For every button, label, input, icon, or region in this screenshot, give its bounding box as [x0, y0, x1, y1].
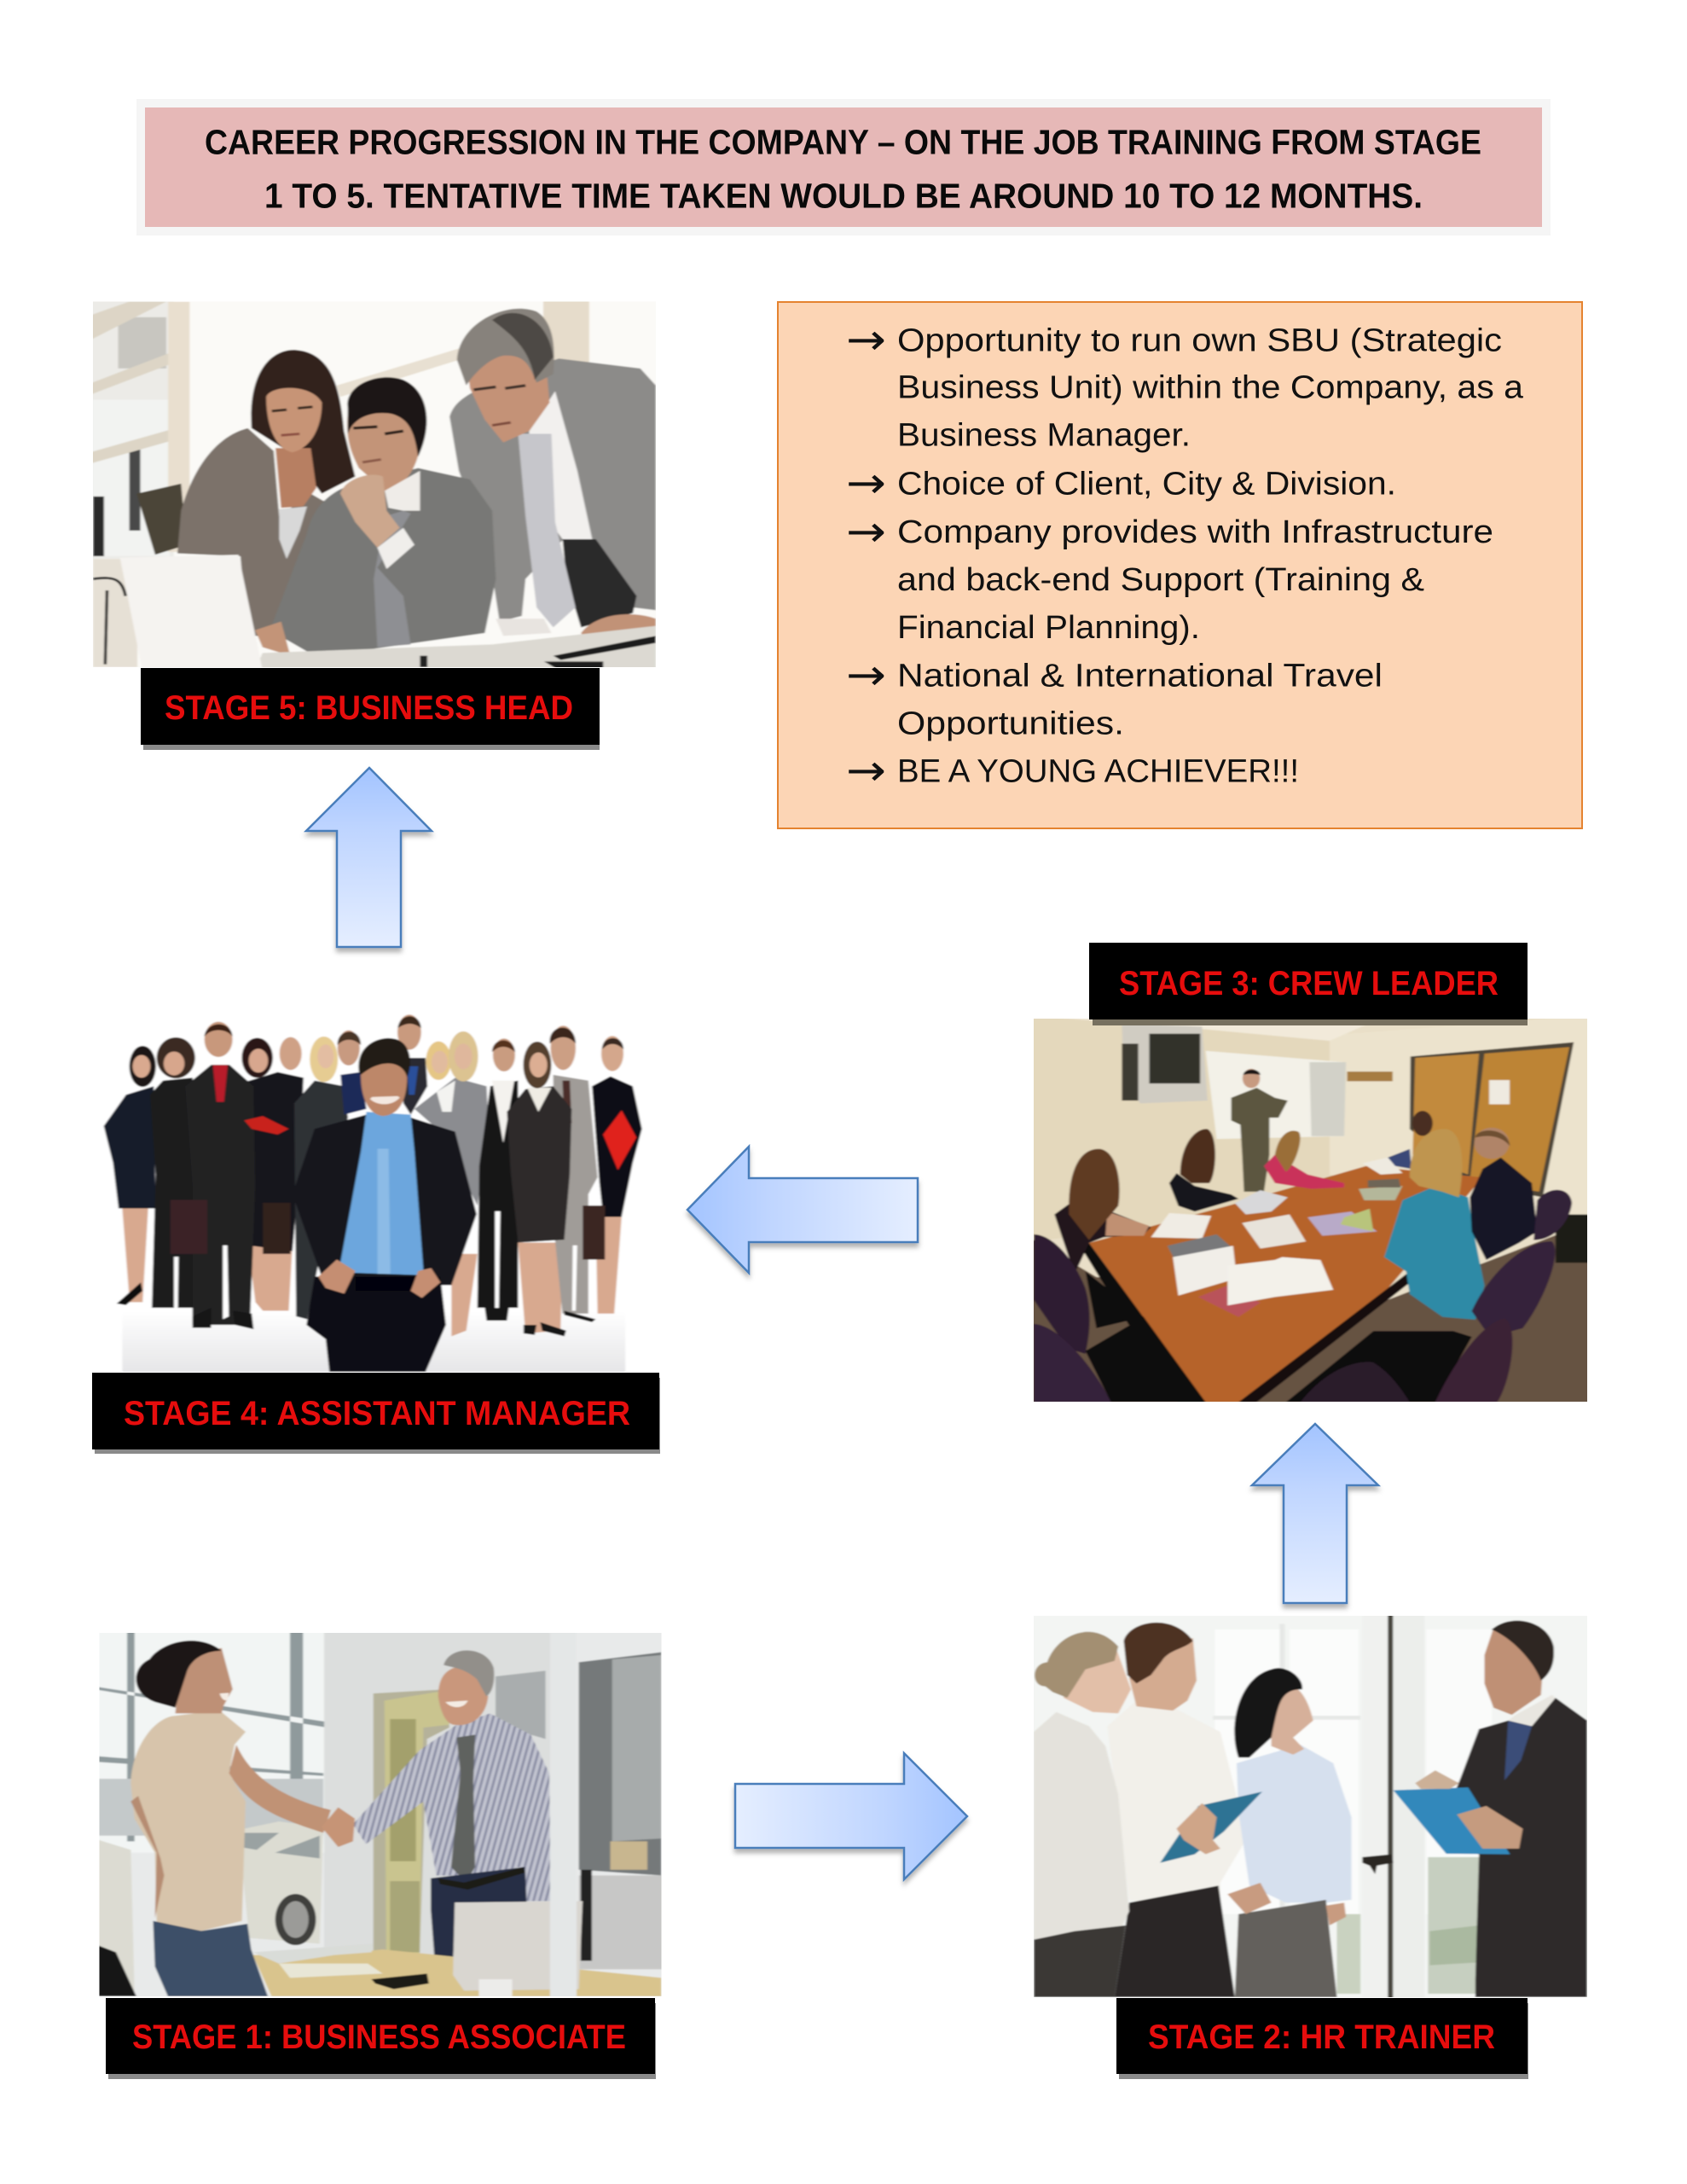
floor — [1023, 1220, 1595, 1408]
bullet line 1: Business Unit) within the Company, as a — [897, 370, 1524, 406]
legs — [122, 1208, 148, 1302]
bullet line 3: Financial Planning). — [897, 610, 1200, 646]
label: stage 4: STAGE 4: ASSISTANT MANAGER — [124, 1395, 630, 1432]
bullet line 3: Company provides with Infrastructure — [897, 514, 1493, 550]
bullet line 2: Choice of Client, City & Division. — [897, 466, 1396, 502]
clipboard 1 and hand — [1160, 1792, 1262, 1863]
man in white — [1107, 1700, 1246, 1906]
bullet line 1 — [846, 315, 1524, 454]
bullet line 3: → — [846, 507, 886, 556]
heads — [130, 1046, 156, 1087]
label: stage 2: STAGE 2: HR TRAINER — [1148, 2018, 1495, 2056]
bullet line 1: Opportunity to run own SBU (Strategic — [897, 322, 1502, 358]
jackets — [104, 1086, 155, 1208]
pillar — [550, 1625, 577, 2001]
label: stage 1 — [106, 1998, 656, 2079]
middle man — [270, 468, 496, 653]
chairs — [1533, 1190, 1572, 1240]
leg gaps — [174, 1211, 577, 1319]
label: stage 3 — [1089, 943, 1528, 1025]
seated people — [1054, 1197, 1151, 1275]
bullet line 4: → — [846, 650, 886, 700]
arrow: stage 1 right to stage 2 — [735, 1753, 967, 1879]
label: stage 1: STAGE 1: BUSINESS ASSOCIATE — [132, 2018, 626, 2056]
woman curly hair — [1237, 1745, 1352, 1902]
label: stage 3: STAGE 3: CREW LEADER — [1119, 965, 1499, 1002]
label: stage 5: STAGE 5: BUSINESS HEAD — [165, 689, 573, 727]
shoes — [193, 1308, 595, 1336]
woman — [251, 350, 355, 494]
briefcases — [171, 1199, 207, 1254]
books — [1242, 1215, 1306, 1249]
laptop and desk — [252, 626, 656, 678]
photo: stage 4 group of business people — [78, 984, 677, 1382]
bullet line 5: BE A YOUNG ACHIEVER!!! — [897, 754, 1299, 790]
right man — [449, 358, 656, 622]
table — [1089, 1166, 1482, 1403]
car — [94, 1838, 135, 1995]
woman — [130, 1711, 246, 1931]
photo: stage 1 handshake — [94, 1625, 675, 2001]
bullet line 4: Opportunities. — [897, 706, 1124, 742]
bullet line 2 — [846, 458, 1396, 508]
arrow: stage 4 up to stage 5 — [306, 768, 432, 947]
bullet line 3 — [846, 507, 1493, 646]
title banner: 1 TO 5. TENTATIVE TIME TAKEN WOULD BE AROUND 10 TO 12 MONTHS. — [264, 176, 1423, 215]
title banner: CAREER PROGRESSION IN THE COMPANY – ON THE JOB TRAINING FROM STAGE — [205, 123, 1481, 162]
bullet line 2: → — [846, 458, 886, 508]
woman with bun — [1034, 1712, 1129, 1994]
presenter — [1232, 1088, 1288, 1192]
photo: stage 5 business head team at laptop — [84, 294, 665, 678]
photo: stage 3 meeting room — [1023, 1015, 1595, 1408]
arrow: stage 2 up to stage 3 — [1252, 1424, 1378, 1603]
bullet line 5 — [846, 746, 1299, 795]
desk and items — [253, 1949, 662, 1996]
title banner — [136, 99, 1551, 235]
bullet line 3: and back-end Support (Training & — [897, 562, 1424, 598]
main man — [293, 1115, 477, 1288]
bullet line 5: → — [846, 746, 886, 795]
panel: benefits of stage 5 — [778, 302, 1582, 828]
bullet line 4: National & International Travel — [897, 659, 1383, 694]
label: stage 4 — [92, 1373, 660, 1454]
arrow: stage 3 left to stage 4 — [687, 1147, 918, 1273]
label: stage 5 — [141, 668, 600, 750]
label: stage 2 — [1116, 1998, 1528, 2079]
bullet line 1: → — [846, 315, 886, 364]
bullet line 4 — [846, 650, 1383, 742]
man in suit — [1435, 1698, 1587, 1997]
photo: stage 2 team with clipboards — [1023, 1612, 1595, 2005]
bullet line 1: Business Manager. — [897, 418, 1191, 454]
man — [353, 1713, 551, 1901]
